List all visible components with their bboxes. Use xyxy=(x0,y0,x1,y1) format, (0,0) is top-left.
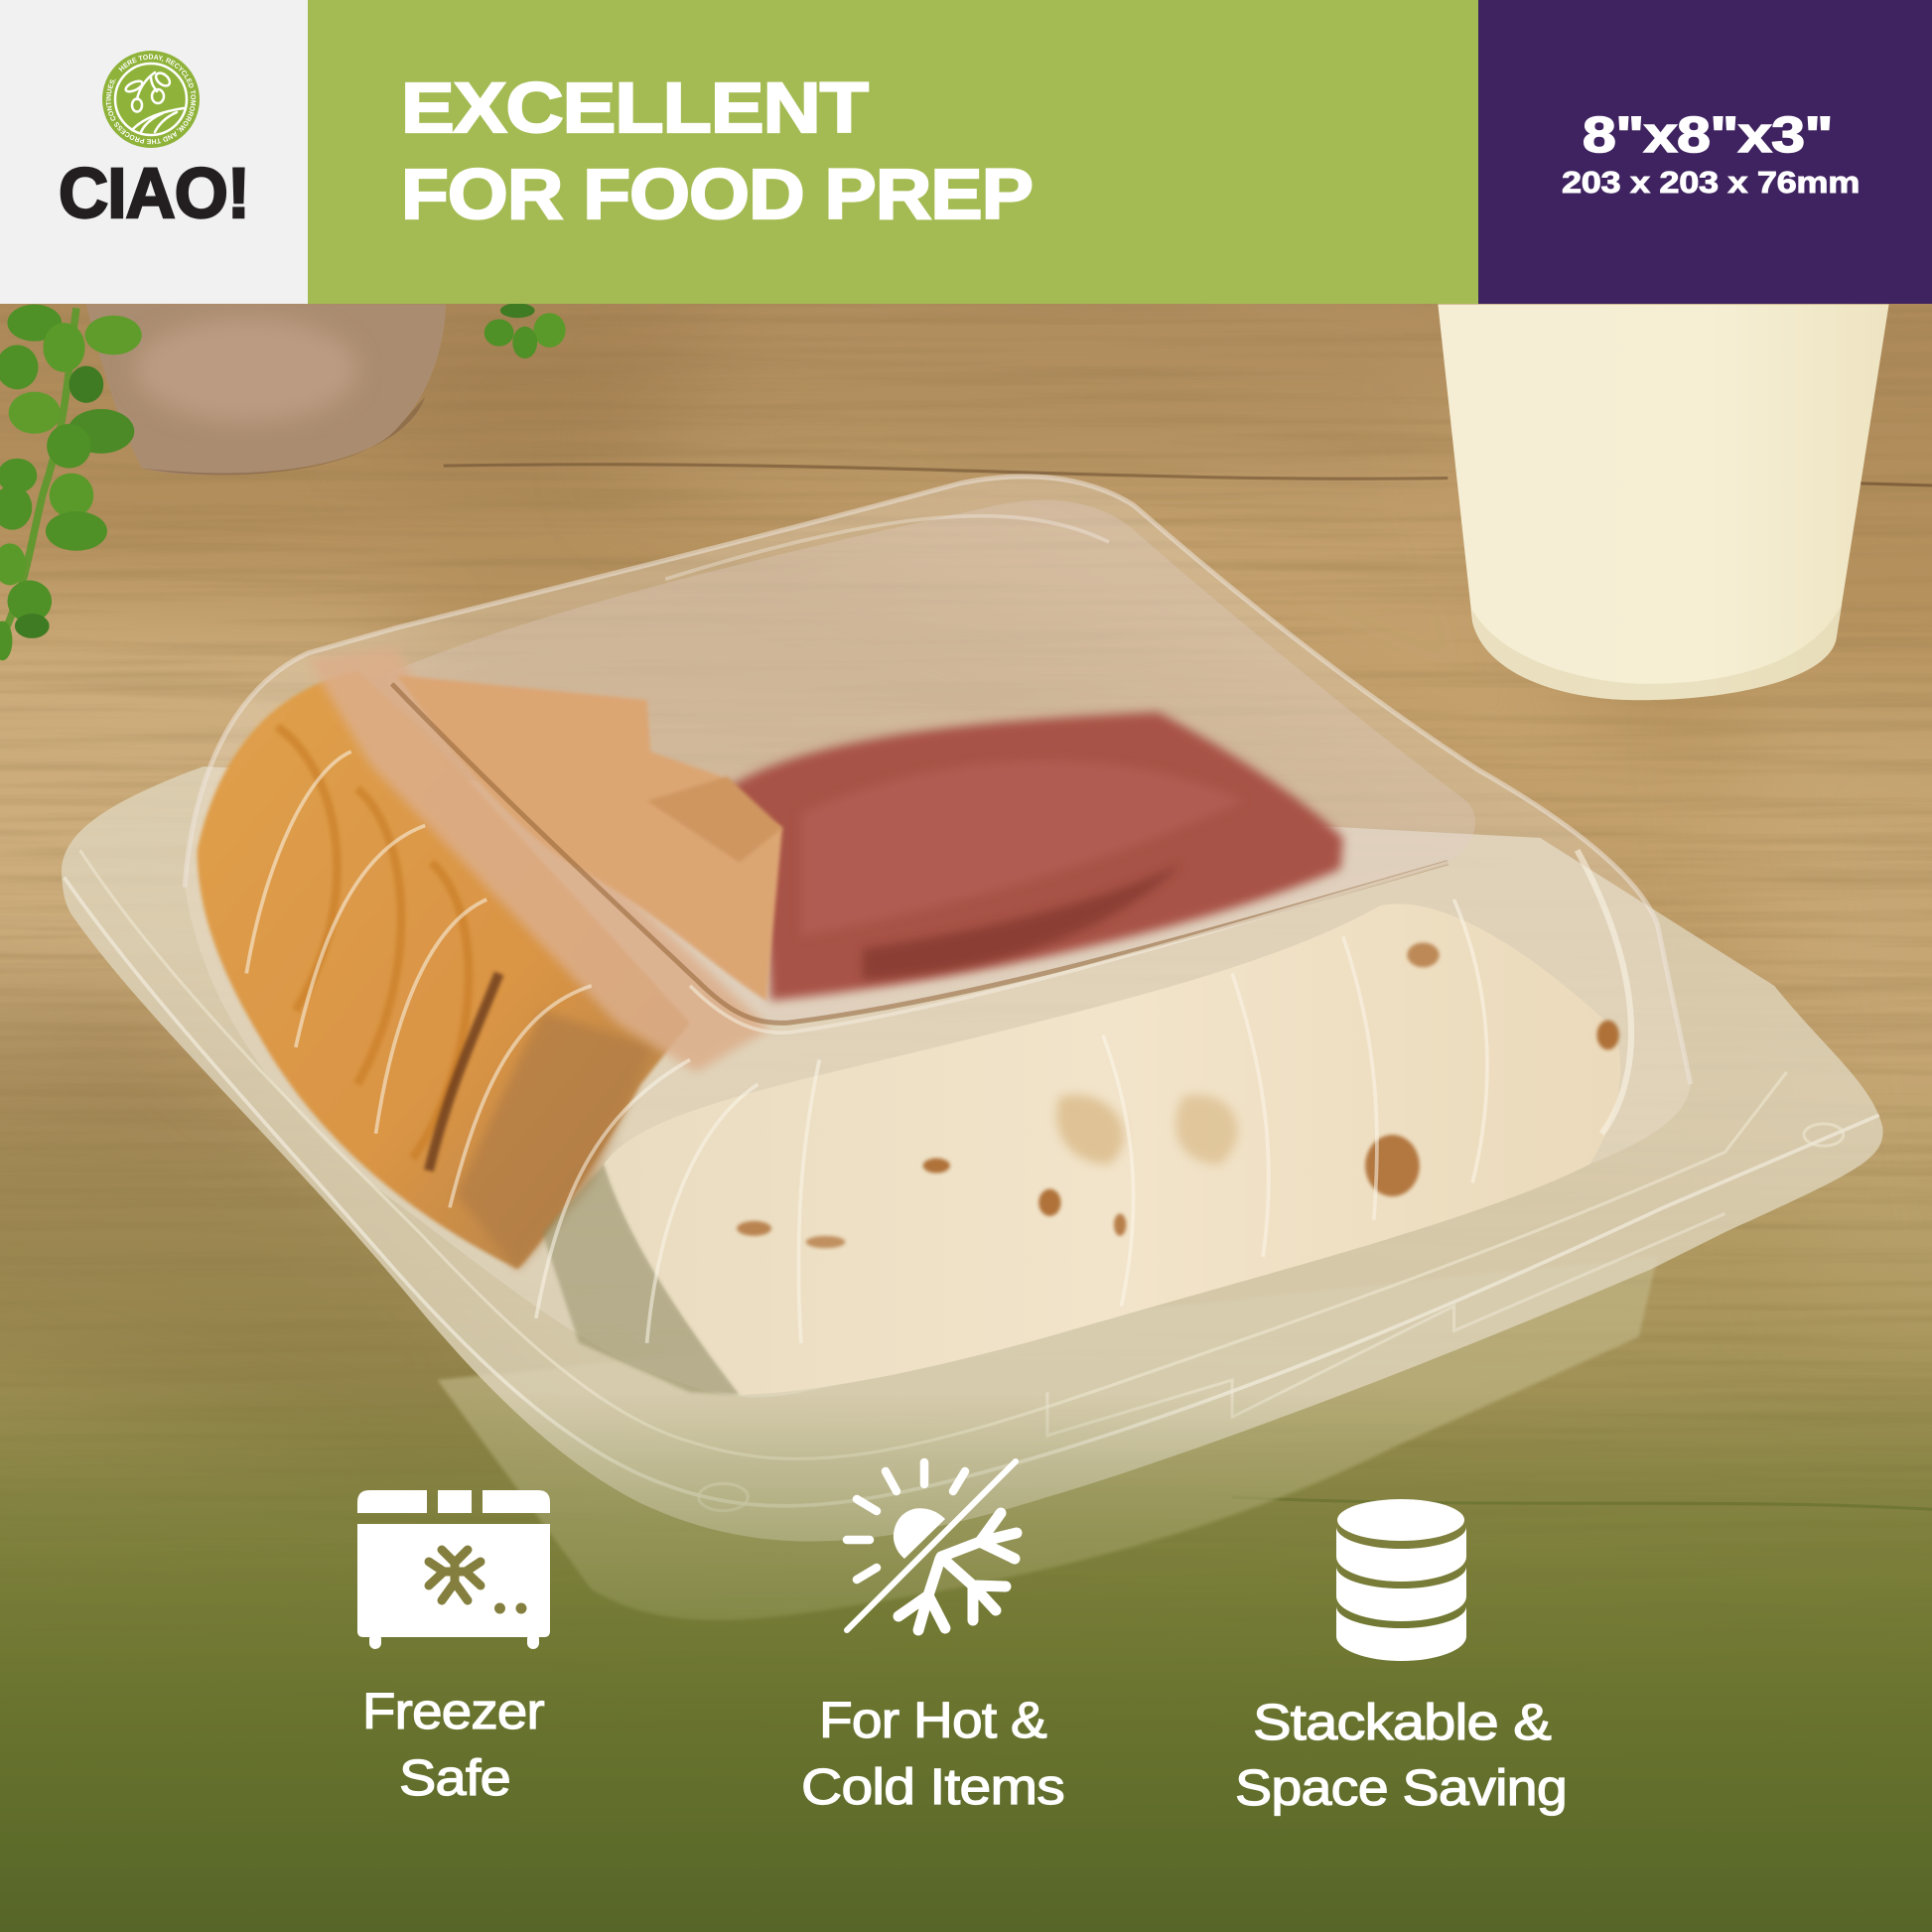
folded chip xyxy=(397,675,782,1001)
table green fade xyxy=(0,1047,1932,1932)
burrito xyxy=(604,903,1620,1395)
lower rim xyxy=(62,766,1883,1541)
label: Safe xyxy=(399,1749,510,1806)
label: Space Saving xyxy=(1235,1759,1567,1816)
dome lid tint xyxy=(185,477,1691,1397)
feature: freezer safe xyxy=(357,1490,550,1806)
succulent leaves xyxy=(0,303,566,660)
peach lid band over chips xyxy=(308,647,770,1072)
logo wordmark: CIAO! xyxy=(59,155,249,233)
header: logo panel xyxy=(0,0,308,304)
title: EXCELLENT xyxy=(401,69,868,148)
paper cup xyxy=(1438,305,1889,700)
label: For Hot & xyxy=(819,1692,1047,1748)
label xyxy=(1235,1694,1567,1816)
title: FOR FOOD PREP xyxy=(401,156,1033,234)
stone plant pot xyxy=(86,305,446,475)
container holes xyxy=(699,1124,1844,1511)
icon: freezer xyxy=(357,1490,550,1649)
title xyxy=(401,69,1033,234)
header: title panel xyxy=(308,0,1478,304)
label: Freezer xyxy=(362,1683,545,1739)
label: Cold Items xyxy=(801,1758,1064,1815)
lid top panel tint xyxy=(388,500,1475,1023)
label xyxy=(801,1692,1064,1815)
lid panel edge xyxy=(392,684,1448,1023)
clamshell container xyxy=(62,477,1883,1620)
icon: stacked discs xyxy=(1336,1499,1466,1661)
size in inches: 8"x8"x3" xyxy=(1583,106,1833,163)
dome lid outline xyxy=(185,477,1691,1084)
label: Stackable & xyxy=(1253,1694,1552,1750)
tortilla chips xyxy=(198,671,690,1269)
logo badge: HERE TODAY, RECYCLED TOMORROW, AND THE PROCESS CONTINUES. xyxy=(105,54,197,145)
tray body xyxy=(438,1257,1657,1620)
label xyxy=(362,1683,545,1806)
feature: stackable xyxy=(1235,1499,1567,1816)
lid ribs xyxy=(246,752,1631,1343)
icon: sun and snowflake xyxy=(847,1461,1017,1630)
green fade over container xyxy=(0,1392,1932,1932)
feature: hot and cold xyxy=(801,1461,1064,1815)
salsa xyxy=(727,712,1343,1001)
size in millimetres: 203 x 203 x 76mm xyxy=(1562,165,1860,200)
header: size panel xyxy=(1478,0,1932,304)
burrito toast spots xyxy=(737,942,1619,1248)
